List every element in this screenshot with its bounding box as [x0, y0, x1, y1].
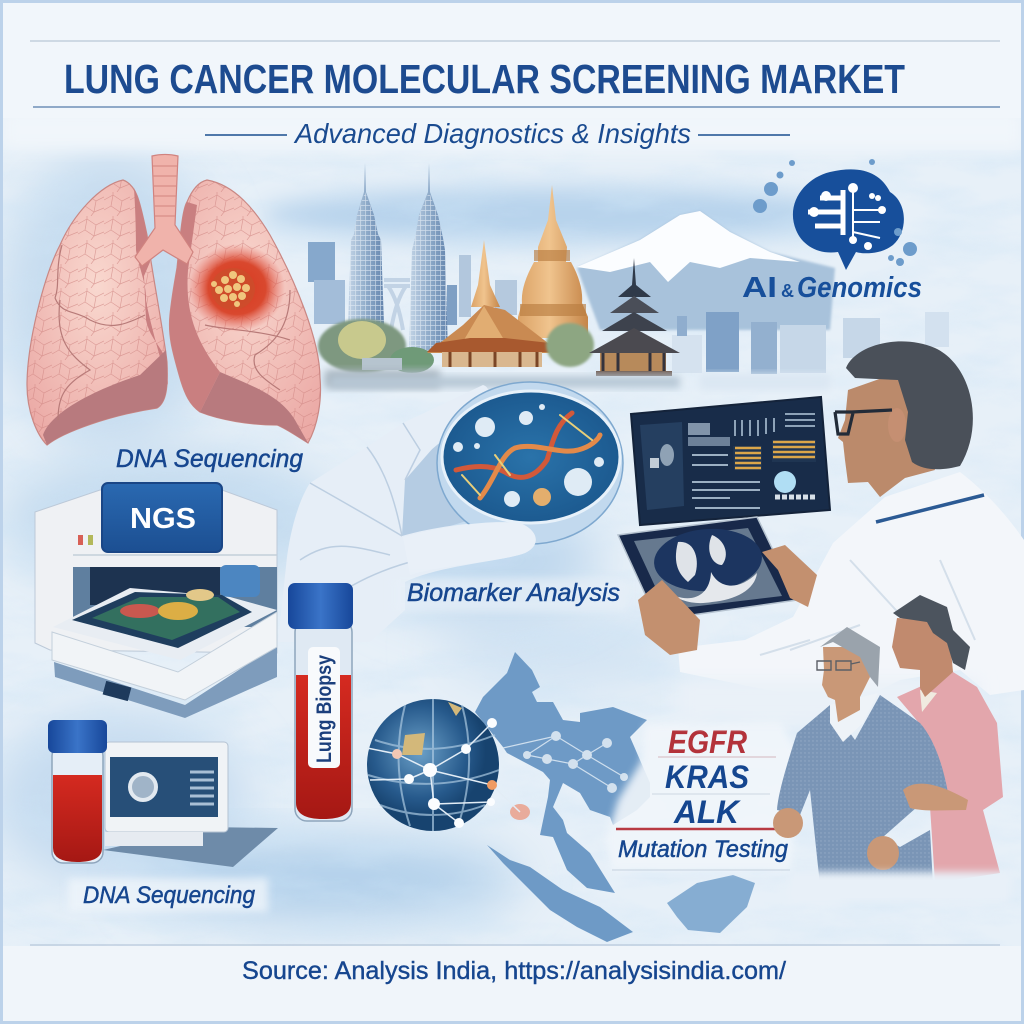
left lung: [27, 180, 168, 445]
mist below doctor: [680, 680, 980, 720]
tumor: [189, 244, 285, 332]
golden stupa: [518, 185, 588, 338]
haze base: [330, 376, 680, 388]
illustration: couple: [773, 595, 1010, 902]
palm shadow: [395, 430, 470, 540]
pagoda: [589, 258, 680, 376]
panel: mutation markers: EGFR: [668, 724, 747, 760]
illustration: gloved hand with petri dish: [278, 382, 623, 642]
panel: mutation markers: Mutation Testing: [618, 836, 789, 863]
right lung: [169, 180, 320, 443]
illustration: small blood tube: [48, 720, 107, 863]
thumb over dish: [403, 522, 536, 575]
glove: [278, 385, 536, 642]
label: AI & Genomics: [742, 272, 922, 304]
illustration: doctor: [678, 341, 1024, 705]
illustration: large blood tube: [288, 583, 353, 821]
illustration: lab computer: [103, 742, 278, 867]
thai temple: [427, 240, 561, 367]
hands: [773, 808, 803, 838]
dish: [437, 382, 623, 544]
label: AI & Genomics: Genomics: [797, 272, 922, 304]
source line: Source: Analysis India, https://analysisindia.com/: [242, 957, 786, 985]
label: AI & Genomics: &: [781, 281, 794, 301]
illustration: tablet and hands: [618, 517, 817, 655]
panel: mutation markers: ALK: [673, 794, 742, 830]
ngs label: NGS: [130, 503, 196, 535]
skyline scene: [308, 163, 949, 390]
trees left: [318, 319, 440, 388]
left buildings: [308, 242, 517, 325]
illustration: globe: [367, 699, 530, 831]
hair: [846, 341, 973, 469]
mist: [790, 872, 1010, 902]
subtitle: Advanced Diagnostics & Insights: [293, 118, 691, 149]
trachea: [135, 154, 193, 266]
label: AI & Genomics: AI: [742, 272, 777, 304]
woman: [892, 595, 1003, 883]
trees by temple: [546, 323, 594, 367]
label: Biomarker Analysis: Biomarker Analysis: [407, 579, 620, 607]
hands: [638, 580, 700, 655]
label: DNA Sequencing top: DNA Sequencing: [116, 445, 303, 473]
illustration: data monitor: [631, 397, 830, 525]
icon: AI brain: [753, 159, 917, 270]
map: southeast asia: [475, 652, 755, 942]
coat: [678, 472, 1024, 705]
glasses: [835, 410, 892, 434]
illustration: NGS machine: [35, 483, 277, 718]
panel: mutation markers: [606, 720, 800, 870]
illustration: lungs: [27, 154, 320, 445]
distant city right: [672, 312, 949, 390]
ear: [888, 408, 906, 442]
dna helix: [456, 413, 600, 498]
panel: mutation markers: KRAS: [665, 759, 750, 795]
label: DNA Sequencing bottom: DNA Sequencing: [83, 882, 256, 909]
tube label: Lung Biopsy: [313, 655, 336, 763]
twin towers: [348, 163, 448, 352]
man: [773, 627, 968, 885]
face and neck: [838, 370, 935, 497]
mountain: [577, 211, 835, 330]
